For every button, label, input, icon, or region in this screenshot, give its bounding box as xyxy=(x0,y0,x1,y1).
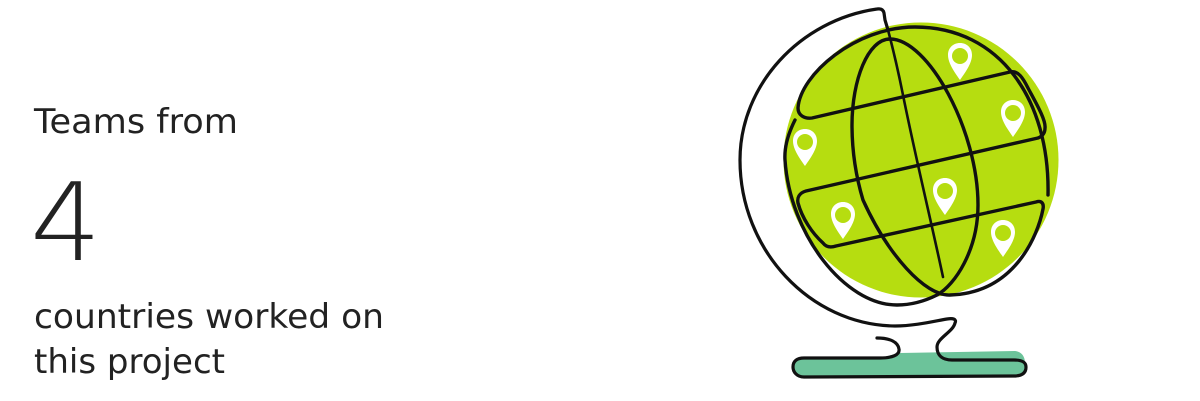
text: countries worked on this project: countries worked on xyxy=(34,297,384,336)
central meridian xyxy=(888,30,943,277)
stand and base outline xyxy=(740,9,1026,377)
pin 2 xyxy=(1001,100,1025,137)
pin 3 xyxy=(793,129,817,166)
big number 4: 4 xyxy=(30,160,101,285)
pin 5 xyxy=(933,178,957,215)
pin 4 xyxy=(831,202,855,239)
white sliver at lower left of globe xyxy=(812,243,925,300)
text block: stat xyxy=(30,102,384,381)
text: countries worked on this project: this project xyxy=(34,342,225,381)
globe outline, latitude and meridian lines xyxy=(785,27,1048,305)
illustration: globe xyxy=(740,9,1058,377)
text: countries worked on this project xyxy=(34,297,384,381)
base fill xyxy=(794,351,1025,377)
pin 1 xyxy=(948,43,972,80)
globe green circle xyxy=(784,22,1058,298)
text: teams from: Teams from xyxy=(33,102,238,141)
pin 6 xyxy=(991,220,1015,257)
location pins xyxy=(793,43,1025,257)
